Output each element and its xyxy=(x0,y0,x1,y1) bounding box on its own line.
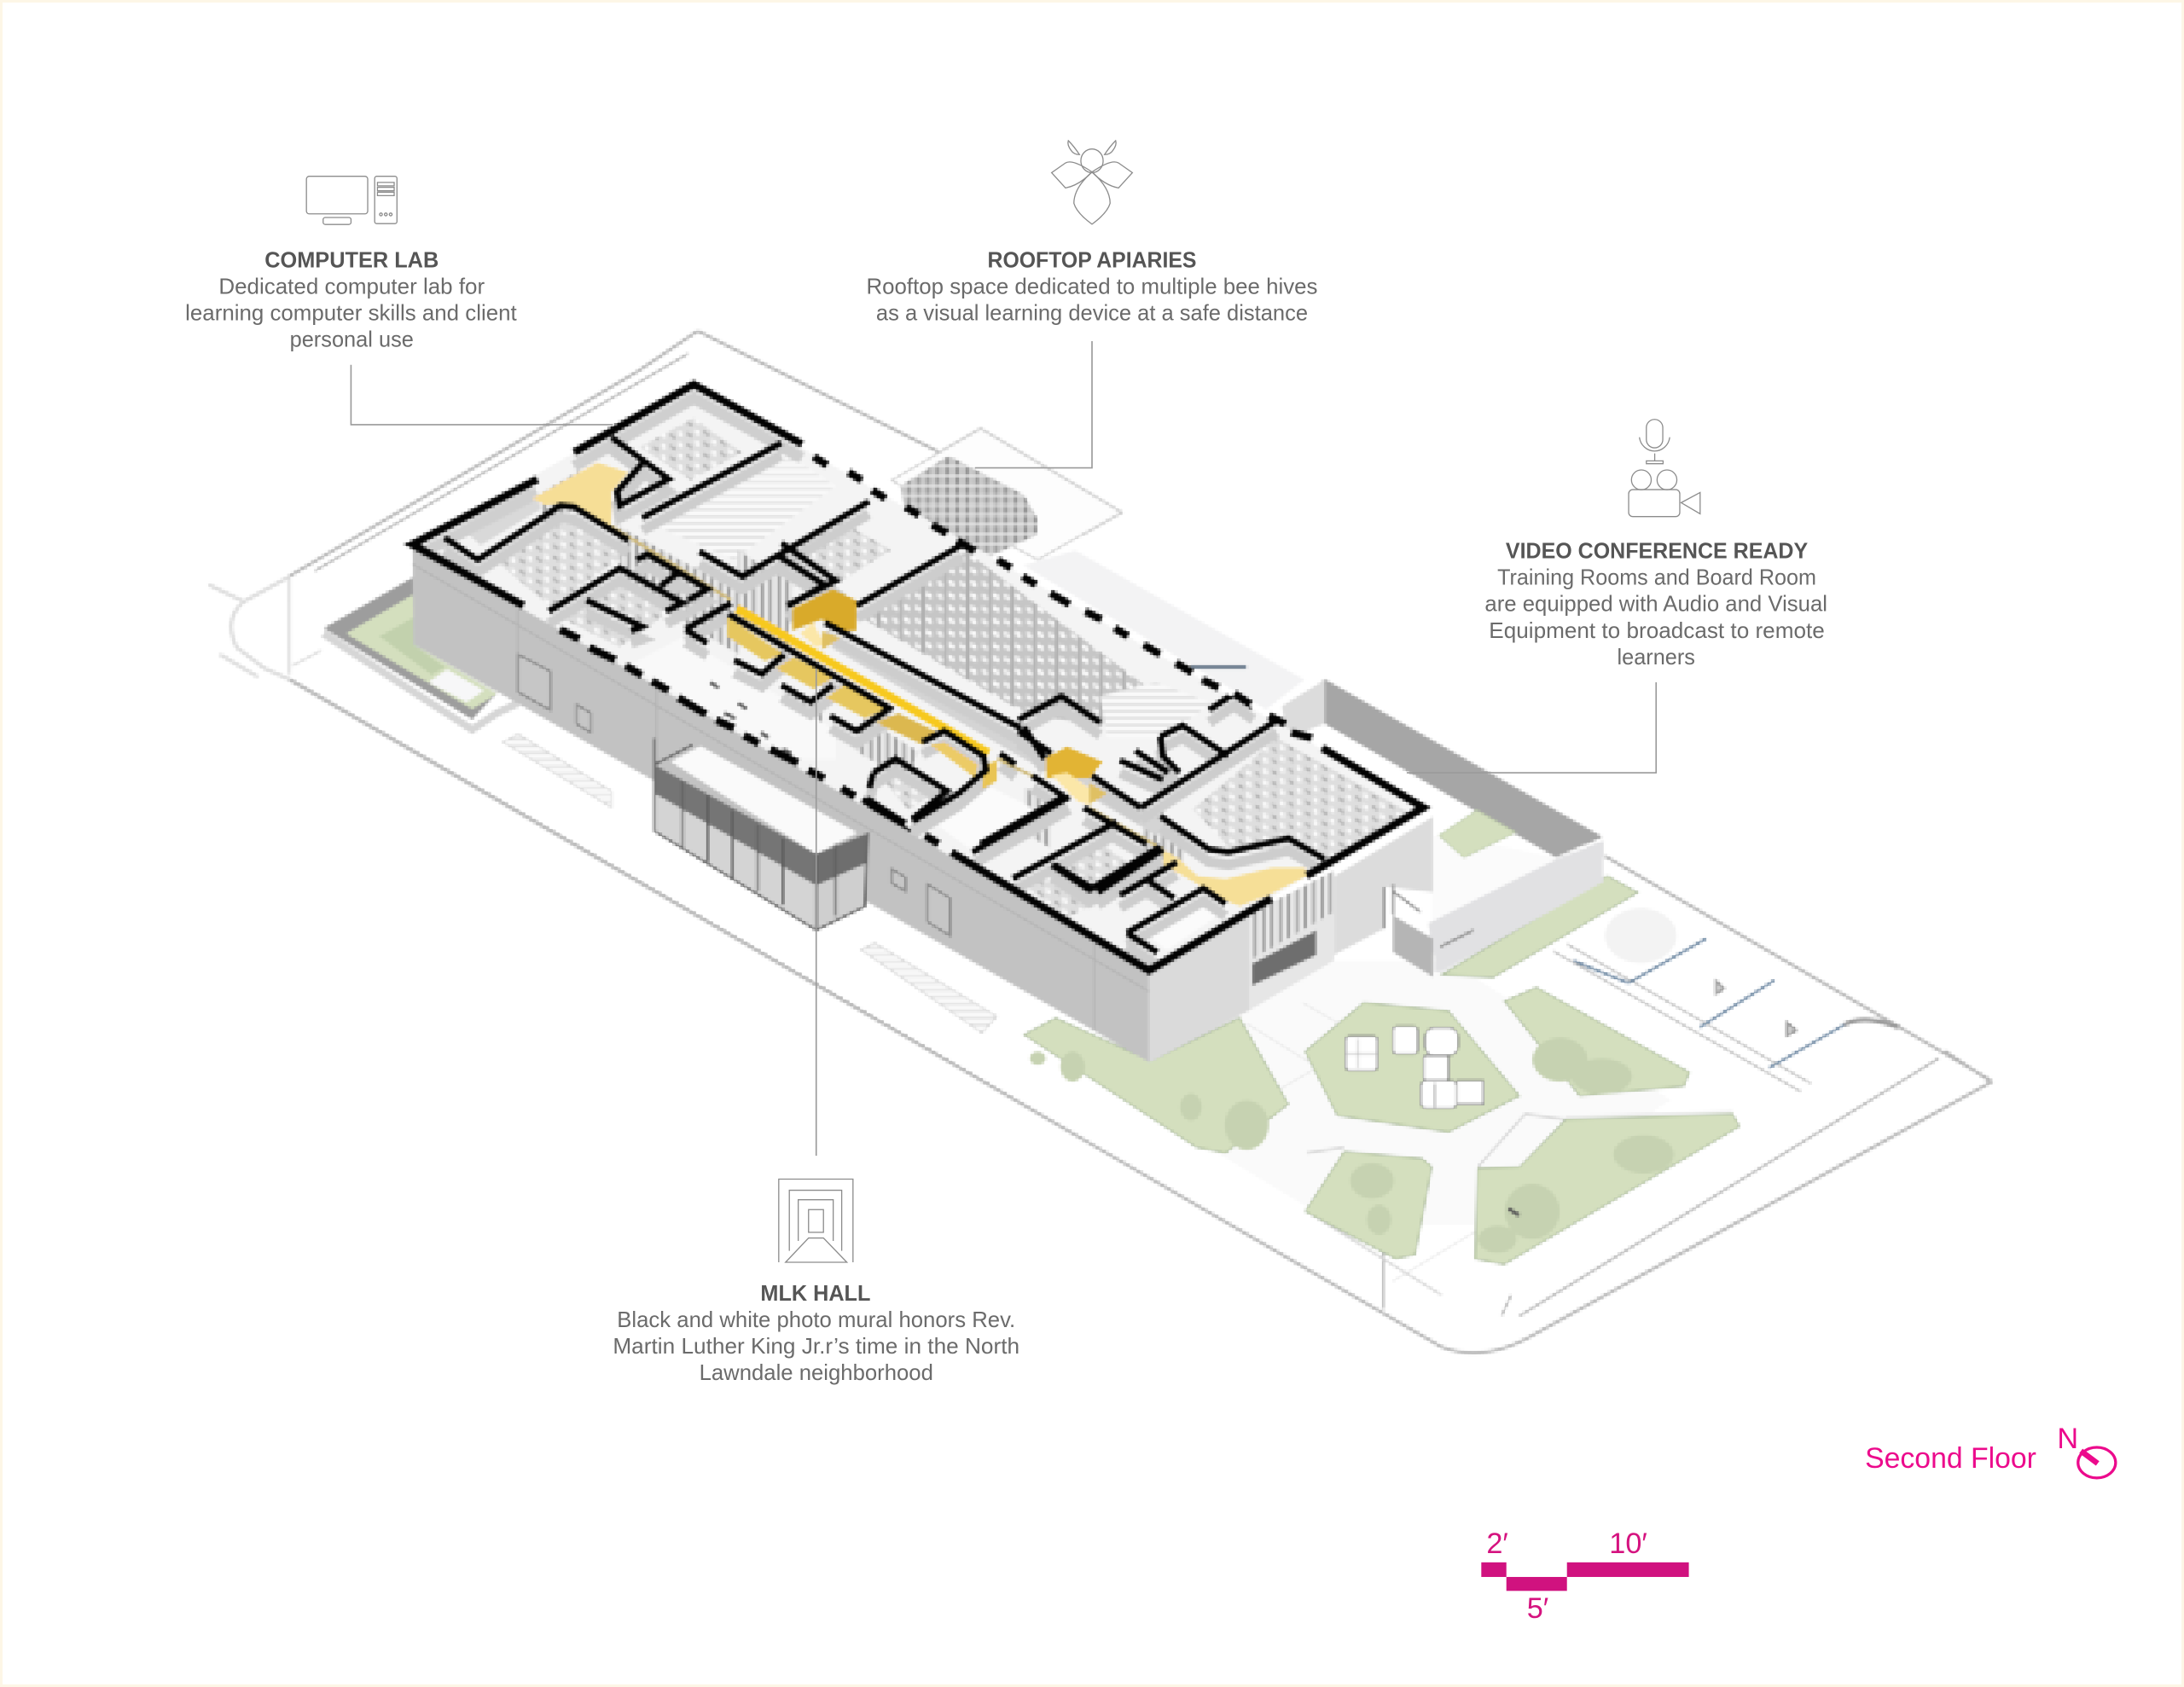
north arrow xyxy=(2057,1423,2116,1478)
icon: computer xyxy=(306,177,397,224)
floor label: Second Floor xyxy=(1865,1442,2036,1475)
scale bar: 2′ xyxy=(1486,1528,1508,1560)
leader line: MLK hall xyxy=(816,669,817,1156)
text: computer lab xyxy=(185,246,517,352)
text: MLK hall: MLK HALL xyxy=(760,1280,870,1306)
green lawn areas xyxy=(1024,876,1740,1264)
text: video conference ready: are equipped with Audio and Visual xyxy=(1484,591,1827,617)
text: video conference ready xyxy=(1484,538,1827,670)
text: rooftop apiaries: ROOFTOP APIARIES xyxy=(988,246,1196,272)
text: video conference ready: Training Rooms and Board Room xyxy=(1497,565,1816,590)
icon: microphone and video camera xyxy=(1629,420,1700,517)
text: computer lab: Dedicated computer lab for xyxy=(218,273,485,299)
text: MLK hall xyxy=(613,1280,1019,1385)
interior rooms xyxy=(412,398,1414,965)
scale bar: 5′ xyxy=(1527,1592,1548,1625)
north arrow: N xyxy=(2057,1423,2078,1455)
outdoor pavilion huts xyxy=(1345,1026,1484,1109)
text: MLK hall: Black and white photo mural honors Rev. xyxy=(617,1307,1015,1332)
isometric second floor plan xyxy=(209,332,1990,1353)
text: rooftop apiaries xyxy=(867,246,1317,326)
text: video conference ready: learners xyxy=(1618,644,1695,670)
text: computer lab: COMPUTER LAB xyxy=(264,246,439,272)
text: MLK hall: Lawndale neighborhood xyxy=(700,1359,933,1385)
building exterior walls xyxy=(412,544,1473,1063)
callouts, icons and legend layer xyxy=(185,141,2116,1625)
leader line: video conference xyxy=(1407,682,1656,773)
parking area xyxy=(1553,907,1898,1092)
text: video conference ready: VIDEO CONFERENCE READY xyxy=(1506,538,1808,564)
text: computer lab: learning computer skills and client xyxy=(185,300,517,326)
scale bar xyxy=(1481,1528,1689,1625)
icon: MLK hall corridor xyxy=(779,1180,853,1262)
left courtyard xyxy=(323,577,497,720)
text: rooftop apiaries: as a visual learning device at a safe distance xyxy=(876,300,1308,326)
black interior walls xyxy=(444,438,1325,953)
scale bar: 10′ xyxy=(1609,1528,1647,1560)
icon: bee xyxy=(1052,141,1132,224)
rear roof strip and screen wall xyxy=(1022,550,1603,972)
text: computer lab: personal use xyxy=(290,327,414,352)
apiary rooftop platform xyxy=(892,429,1121,564)
black exterior walls xyxy=(412,385,1424,971)
text: video conference ready: Equipment to broadcast to remote xyxy=(1489,617,1825,643)
text: MLK hall: Martin Luther King Jr.r’s time in the North xyxy=(613,1333,1019,1359)
leader line: rooftop apiaries xyxy=(975,341,1092,468)
glass entrance canopy xyxy=(654,738,868,930)
yellow circulation highlight xyxy=(532,462,1308,907)
leader line: computer lab xyxy=(351,365,613,425)
site ground and outlines xyxy=(209,332,1990,1353)
text: rooftop apiaries: Rooftop space dedicated to multiple bee hives xyxy=(867,273,1317,299)
roof floor plate xyxy=(412,385,1424,971)
